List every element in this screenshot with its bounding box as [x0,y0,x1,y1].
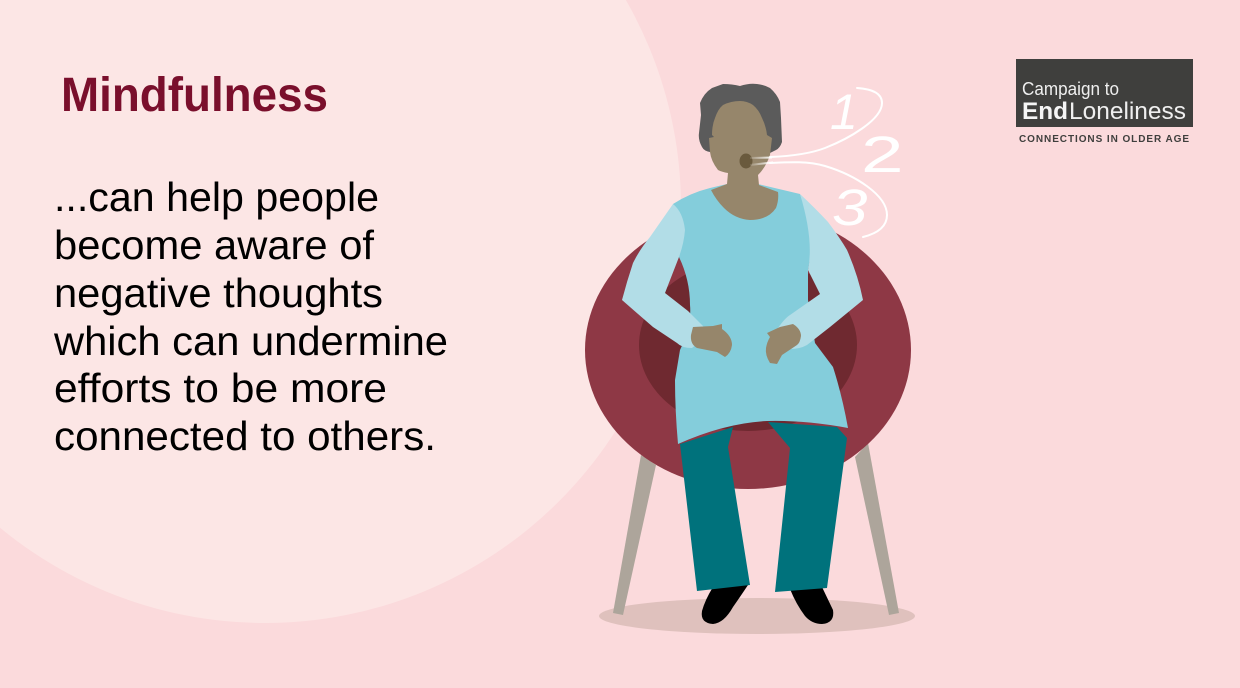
text block: description: efforts to be more [54,365,387,411]
breath lines [770,88,887,237]
number 3: 3 [832,180,867,236]
title: Mindfulness [61,69,328,122]
hair [699,84,782,153]
logo: Campaign to End Loneliness: CONNECTIONS IN OLDER AGE [1019,134,1189,145]
text block: description: negative thoughts [54,270,383,316]
shoes [702,585,833,624]
chair legs [613,443,899,615]
chair seat [585,211,911,489]
text block: description: ...can help people [54,174,379,220]
logo: Campaign to End Loneliness: Campaign to [1022,79,1119,99]
left sleeve [622,204,708,348]
logo: Campaign to End Loneliness: Loneliness [1069,98,1186,125]
hands [691,324,801,364]
breath wisps [750,158,772,165]
illustration: seated person breathing [585,84,915,634]
trousers [680,422,847,592]
background circle [0,0,681,623]
text block: description: connected to others. [54,413,436,459]
tunic [673,184,848,444]
mouth [740,154,752,168]
logo: Campaign to End Loneliness: End [1022,98,1068,125]
text block: description: become aware of [54,222,375,268]
right sleeve [778,194,863,349]
face and neck [709,101,778,220]
text block: description [53,174,448,459]
floor shadow [599,598,915,634]
text block: description: which can undermine [53,318,448,364]
logo: Campaign to End Loneliness [1016,59,1193,145]
number 2: 2 [861,126,904,183]
number 1: 1 [830,84,858,140]
